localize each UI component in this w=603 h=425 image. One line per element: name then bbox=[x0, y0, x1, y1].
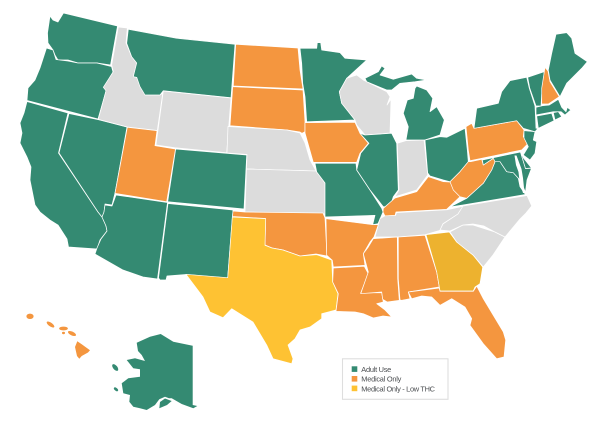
state: Missouri bbox=[315, 163, 383, 225]
state: Alabama bbox=[398, 235, 439, 300]
state: Wisconsin bbox=[339, 75, 391, 135]
state: Delaware bbox=[520, 152, 532, 168]
state: South Carolina bbox=[450, 225, 505, 267]
state: Iowa bbox=[305, 122, 368, 162]
state: Maryland bbox=[482, 152, 532, 192]
state: New Hampshire bbox=[542, 67, 559, 104]
state: Michigan lower peninsula bbox=[403, 86, 444, 140]
state: Pennsylvania bbox=[466, 121, 528, 161]
state: Oklahoma bbox=[232, 211, 327, 256]
state: Hawaii bbox=[26, 314, 90, 359]
map: contiguous United States bbox=[20, 13, 587, 364]
state: Oregon bbox=[27, 48, 113, 119]
state: Washington bbox=[48, 13, 118, 65]
state: Alaska bbox=[111, 334, 197, 410]
state: New Jersey bbox=[523, 131, 537, 160]
state: Idaho bbox=[98, 27, 163, 130]
state: Nevada bbox=[59, 114, 127, 217]
state: Wyoming bbox=[156, 91, 231, 153]
state: Utah bbox=[115, 127, 176, 202]
state: Georgia bbox=[426, 232, 483, 291]
state: North Dakota bbox=[233, 44, 303, 89]
state: Kentucky bbox=[383, 177, 460, 216]
state: Indiana bbox=[395, 140, 428, 197]
water: Chesapeake Bay bbox=[514, 156, 526, 193]
state: Tennessee bbox=[375, 206, 463, 237]
state: New York bbox=[474, 77, 538, 132]
state: Ohio bbox=[425, 128, 468, 182]
state: California bbox=[20, 102, 107, 249]
state: Arkansas bbox=[326, 219, 378, 267]
state: Louisiana bbox=[333, 266, 392, 318]
state: New Mexico bbox=[158, 204, 233, 280]
state: Mississippi bbox=[361, 237, 399, 302]
state: North Carolina bbox=[440, 196, 532, 237]
state: Nebraska bbox=[227, 126, 316, 171]
state: Massachusetts bbox=[536, 99, 571, 115]
legend bbox=[342, 359, 448, 399]
state: Michigan upper peninsula bbox=[365, 66, 427, 90]
state: Arizona bbox=[95, 195, 168, 279]
legend item: Adult Use: Adult Use bbox=[361, 365, 391, 374]
state: Virginia bbox=[450, 162, 526, 207]
state: Kansas bbox=[245, 169, 325, 214]
state: Rhode Island bbox=[553, 112, 562, 120]
legend item: Medical Only - Low THC: Medical Only - Low THC bbox=[361, 384, 436, 394]
state: Maine bbox=[548, 33, 587, 97]
state: West Virginia bbox=[450, 158, 500, 198]
legend item: Medical Only: Medical Only bbox=[361, 375, 402, 384]
state: Florida bbox=[408, 286, 506, 359]
state: Texas bbox=[186, 217, 338, 364]
state: Montana bbox=[127, 29, 235, 98]
state: Minnesota bbox=[300, 43, 367, 122]
state: Colorado bbox=[168, 149, 247, 209]
state: Illinois bbox=[357, 133, 398, 207]
state: Vermont bbox=[528, 72, 544, 106]
state: South Dakota bbox=[230, 87, 305, 133]
state: Connecticut bbox=[537, 113, 554, 128]
